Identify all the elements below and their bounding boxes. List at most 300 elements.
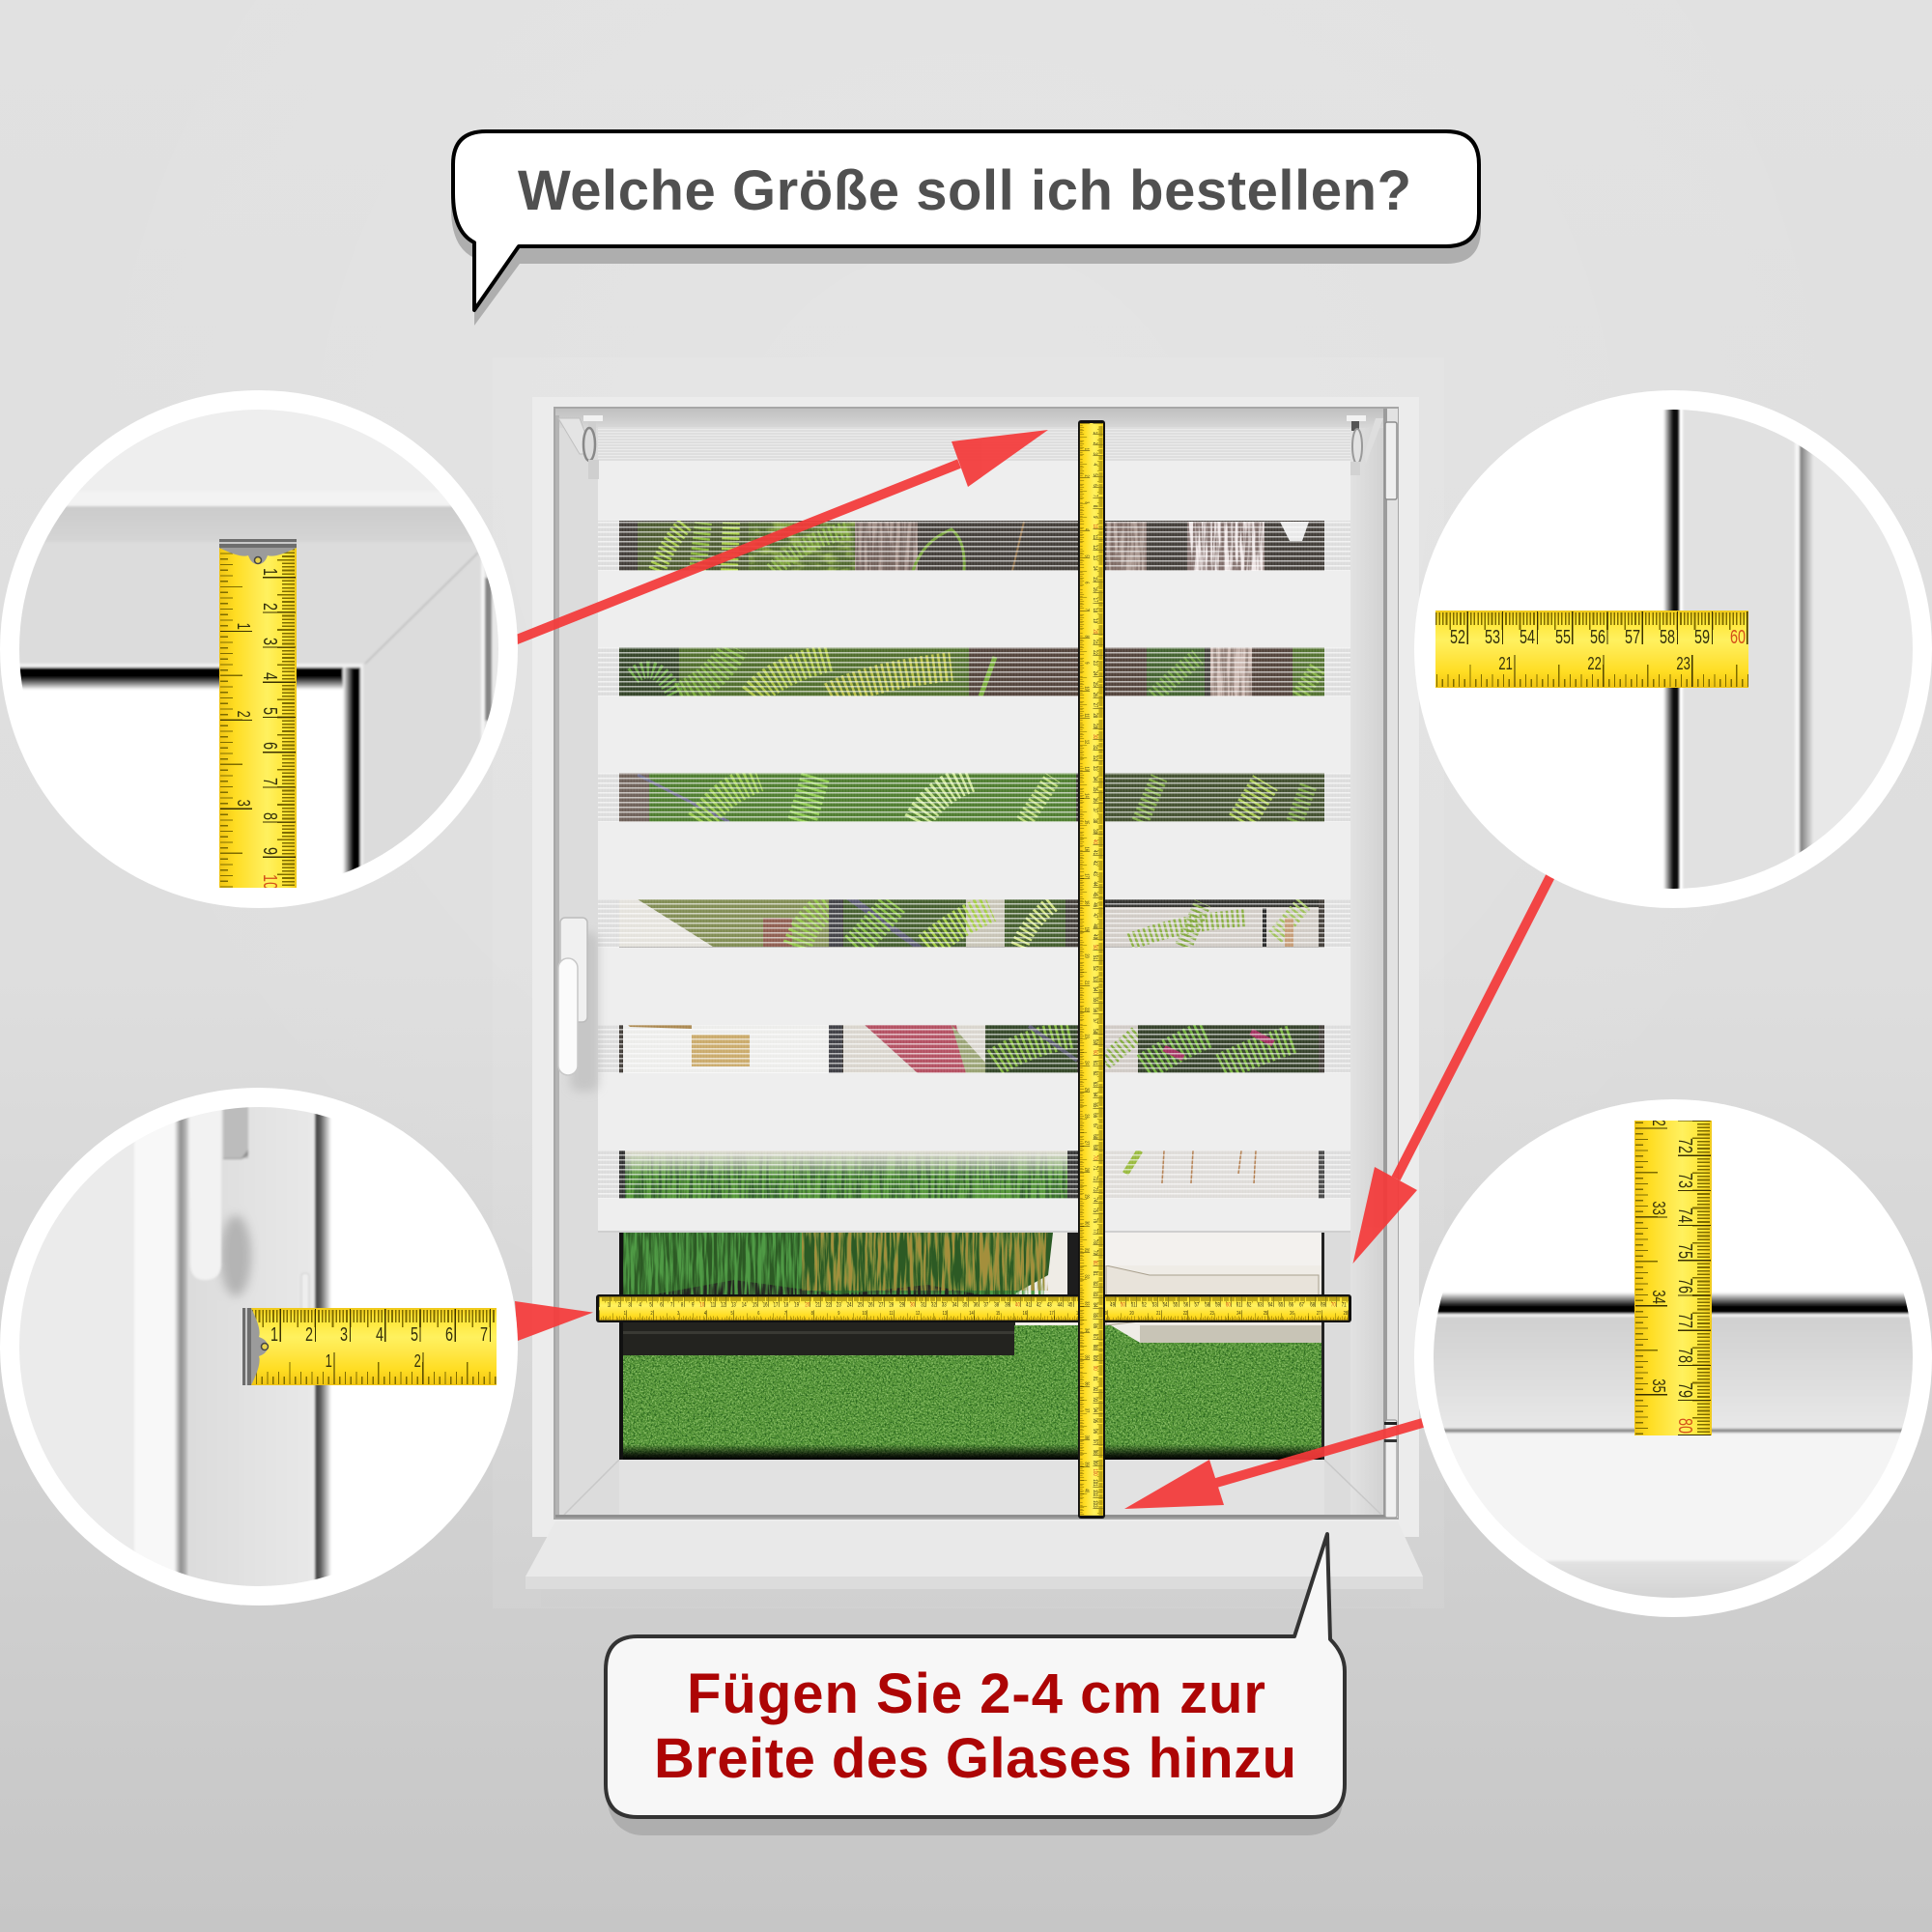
vertical measuring tape across window: 15 <box>1084 820 1090 824</box>
vertical measuring tape across window: 99 <box>1092 1461 1098 1465</box>
tape measure 1 to 7: 3 <box>340 1324 348 1346</box>
horizontal measuring tape across window: 12 <box>916 1310 920 1316</box>
foliage strip 6 <box>619 1151 1324 1199</box>
tape measure 1 to 7: 6 <box>445 1324 453 1346</box>
horizontal measuring tape across window: 50 <box>1121 1302 1125 1308</box>
vertical measuring tape across window: 2 <box>1092 442 1098 444</box>
horizontal measuring tape across window: 27 <box>879 1302 883 1308</box>
horizontal measuring tape across window: 54 <box>1163 1302 1167 1308</box>
horizontal measuring tape across window: 10 <box>863 1310 867 1316</box>
foliage strip 4 <box>619 899 1319 947</box>
horizontal measuring tape across window: 16 <box>1023 1310 1027 1316</box>
horizontal measuring tape across window: 61 <box>1236 1302 1241 1308</box>
vertical measuring tape across window: 63 <box>1092 1082 1098 1086</box>
horizontal measuring tape across window: 44 <box>1058 1302 1063 1308</box>
vertical measuring tape across window: 65 <box>1092 1102 1098 1107</box>
tape measure 1 to 7: 1 <box>270 1324 278 1346</box>
vertical measuring tape across window: 15 <box>1092 577 1098 582</box>
horizontal measuring tape across window: 71 <box>1342 1302 1347 1308</box>
tape measure 72 to 80: 78 <box>1674 1348 1695 1363</box>
tape measure 72 to 80: 33 <box>1649 1201 1668 1215</box>
arrow: to bottom of window <box>1124 1422 1426 1509</box>
horizontal measuring tape across window: 13 <box>943 1310 947 1316</box>
horizontal measuring tape across window: 3 <box>629 1302 631 1308</box>
horizontal measuring tape across window: 1 <box>624 1310 626 1316</box>
foliage strip 3 <box>619 773 1324 822</box>
horizontal measuring tape across window: 5 <box>730 1310 733 1316</box>
horizontal measuring tape across window: 38 <box>994 1302 999 1308</box>
vertical measuring tape across window: 97 <box>1092 1439 1098 1444</box>
vertical measuring tape across window: 34 <box>1092 777 1098 781</box>
tape measure 52 to 60: 55 <box>1555 627 1571 648</box>
vertical measuring tape across window: 32 <box>1084 1274 1090 1279</box>
horizontal measuring tape across window: 16 <box>763 1302 768 1308</box>
vertical measuring tape across window: 41 <box>1092 850 1098 855</box>
horizontal measuring tape across window: 2 <box>618 1302 620 1308</box>
horizontal measuring tape across window: 12 <box>721 1302 725 1308</box>
vertical measuring tape across window: 30 <box>1084 1221 1090 1225</box>
horizontal measuring tape across window: 26 <box>868 1302 872 1308</box>
horizontal measuring tape across window: 24 <box>847 1302 852 1308</box>
vertical measuring tape across window: 18 <box>1092 608 1098 612</box>
zebra blind <box>598 427 1350 1233</box>
horizontal measuring tape across window: 51 <box>1131 1302 1136 1308</box>
vertical measuring tape across window: 17 <box>1092 598 1098 602</box>
horizontal measuring tape across window: 27 <box>1317 1310 1321 1316</box>
tape measure 1 to 10: 6 <box>259 742 280 750</box>
tape measure 52 to 60: 57 <box>1625 627 1640 648</box>
vertical measuring tape across window: 19 <box>1092 618 1098 623</box>
vertical measuring tape across window: 55 <box>1092 998 1098 1002</box>
horizontal measuring tape across window: 65 <box>1278 1302 1283 1308</box>
vertical measuring tape across window: 28 <box>1084 1168 1090 1172</box>
horizontal measuring tape across window: 17 <box>774 1302 778 1308</box>
vertical measuring tape across window: 25 <box>1084 1088 1090 1092</box>
vertical measuring tape across window: 53 <box>1092 977 1098 981</box>
horizontal measuring tape across window: 6 <box>757 1310 759 1316</box>
vertical measuring tape across window: 14 <box>1092 566 1098 571</box>
horizontal measuring tape across window: 8 <box>810 1310 813 1316</box>
horizontal measuring tape across window: 1 <box>608 1302 610 1308</box>
vertical measuring tape across window: 27 <box>1084 1141 1090 1145</box>
vertical measuring tape across window: 67 <box>1092 1123 1098 1128</box>
vertical measuring tape across window: 29 <box>1084 1194 1090 1199</box>
tape measure 1 to 10: 2 <box>259 603 280 611</box>
vertical measuring tape across window: 85 <box>1092 1313 1098 1318</box>
horizontal measuring tape across window: 53 <box>1152 1302 1157 1308</box>
vertical measuring tape across window: 38 <box>1092 818 1098 823</box>
vertical measuring tape across window: 56 <box>1092 1008 1098 1012</box>
vertical measuring tape across window: 9 <box>1084 662 1090 664</box>
vertical measuring tape across window: 73 <box>1092 1187 1098 1191</box>
tape measure 1 to 10: 7 <box>259 778 280 785</box>
horizontal measuring tape across window: 23 <box>1209 1310 1214 1316</box>
tape measure 52 to 60: 22 <box>1587 654 1602 673</box>
tape measure 52 to 60: 58 <box>1660 627 1675 648</box>
vertical measuring tape across window: 96 <box>1092 1429 1098 1434</box>
vertical measuring tape across window: 54 <box>1092 987 1098 991</box>
vertical measuring tape across window: 49 <box>1092 934 1098 939</box>
vertical measuring tape across window: 35 <box>1092 787 1098 791</box>
tape measure 72 to 80: 73 <box>1674 1173 1695 1188</box>
vertical measuring tape across window: 66 <box>1092 1113 1098 1118</box>
arrow: to left end of tape <box>515 1301 593 1341</box>
vertical measuring tape across window: 50 <box>1092 945 1098 950</box>
vertical measuring tape across window: 4 <box>1084 528 1090 530</box>
horizontal measuring tape across window: 15 <box>753 1302 757 1308</box>
horizontal measuring tape across window: 68 <box>1310 1302 1315 1308</box>
horizontal measuring tape across window: 55 <box>1174 1302 1178 1308</box>
vertical measuring tape across window: 88 <box>1092 1345 1098 1350</box>
vertical measuring tape across window: 39 <box>1084 1462 1090 1466</box>
vertical measuring tape across window: 26 <box>1084 1114 1090 1119</box>
horizontal measuring tape across window: 19 <box>794 1302 799 1308</box>
tape measure 72 to 80: 80 <box>1674 1418 1695 1434</box>
tape measure 72 to 80 <box>1634 1121 1712 1435</box>
vertical measuring tape across window: 62 <box>1092 1071 1098 1076</box>
tape measure 1 to 10: 3 <box>234 800 253 807</box>
panel: detail circle top left <box>0 390 518 908</box>
tape measure 52 to 60: 23 <box>1676 654 1690 673</box>
bottom hinge <box>1384 1420 1397 1518</box>
vertical measuring tape across window: 98 <box>1092 1450 1098 1455</box>
horizontal measuring tape across window: 70 <box>1331 1302 1336 1308</box>
horizontal measuring tape across window: 20 <box>805 1302 810 1308</box>
vertical measuring tape across window: 46 <box>1092 902 1098 907</box>
vertical measuring tape across window: 33 <box>1092 766 1098 771</box>
horizontal measuring tape across window: 11 <box>711 1302 715 1308</box>
horizontal measuring tape across window: 36 <box>974 1302 978 1308</box>
top speech bubble <box>451 131 1481 326</box>
horizontal measuring tape across window: 30 <box>910 1302 915 1308</box>
horizontal measuring tape across window: 33 <box>942 1302 947 1308</box>
window sill <box>526 1521 1423 1606</box>
horizontal measuring tape across window: 25 <box>1264 1310 1267 1316</box>
panel: detail circle bottom right <box>1414 1099 1932 1617</box>
horizontal measuring tape across window: 37 <box>983 1302 988 1308</box>
horizontal measuring tape across window: 59 <box>1215 1302 1220 1308</box>
tape measure 72 to 80: 79 <box>1674 1382 1695 1398</box>
vertical measuring tape across window: 24 <box>1092 671 1098 676</box>
vertical measuring tape across window: 11 <box>1084 714 1090 718</box>
tape measure 1 to 10: 1 <box>259 568 280 576</box>
horizontal measuring tape across window: 49 <box>1110 1302 1115 1308</box>
horizontal measuring tape across window: 32 <box>931 1302 936 1308</box>
vertical measuring tape across window: 5 <box>1084 554 1090 557</box>
horizontal measuring tape across window: 20 <box>1129 1310 1134 1316</box>
fabric bands <box>598 461 1350 1233</box>
roller bracket left <box>558 415 603 479</box>
vertical measuring tape across window: 3 <box>1084 501 1090 503</box>
tape measure 72 to 80: 35 <box>1649 1378 1668 1393</box>
mesh strips <box>598 521 1350 1199</box>
horizontal measuring tape across window: 47 <box>1089 1302 1094 1308</box>
tape measure 1 to 10: 9 <box>259 847 280 855</box>
vertical measuring tape across window: 6 <box>1092 484 1098 487</box>
arrow: to top of blind <box>512 430 1048 641</box>
horizontal measuring tape across window: 13 <box>731 1302 736 1308</box>
roller bracket right <box>1347 415 1383 475</box>
vertical measuring tape across window: 82 <box>1092 1282 1098 1286</box>
vertical measuring tape across window: 36 <box>1092 798 1098 802</box>
vertical measuring tape across window: 95 <box>1092 1418 1098 1423</box>
vertical measuring tape across window: 42 <box>1092 861 1098 866</box>
vertical measuring tape across window: 91 <box>1092 1377 1098 1380</box>
vertical measuring tape across window: 14 <box>1084 793 1090 798</box>
horizontal measuring tape across window: 21 <box>1156 1310 1160 1316</box>
vertical measuring tape across window: 3 <box>1092 453 1098 455</box>
vertical measuring tape across window: 21 <box>1092 639 1098 644</box>
vertical measuring tape across window: 40 <box>1092 839 1098 844</box>
vertical measuring tape across window: 71 <box>1092 1166 1098 1171</box>
horizontal measuring tape across window: 8 <box>681 1302 683 1308</box>
vertical measuring tape across window: 21 <box>1084 980 1090 984</box>
vertical measuring tape across window: 76 <box>1092 1218 1098 1223</box>
horizontal measuring tape across window: 39 <box>1005 1302 1009 1308</box>
vertical measuring tape across window: 7 <box>1084 609 1090 611</box>
vertical measuring tape across window: 26 <box>1092 693 1098 696</box>
vertical measuring tape across window: 92 <box>1092 1387 1098 1391</box>
vertical measuring tape across window: 75 <box>1092 1208 1098 1212</box>
vertical measuring tape across window: 44 <box>1092 882 1098 887</box>
vertical measuring tape across window: 9 <box>1092 516 1098 518</box>
vertical measuring tape across window: 24 <box>1084 1061 1090 1065</box>
vertical measuring tape across window: 45 <box>1092 893 1098 896</box>
horizontal measuring tape across window: 17 <box>1049 1310 1054 1316</box>
vertical measuring tape across window: 64 <box>1092 1093 1098 1096</box>
vertical measuring tape across window: 84 <box>1092 1302 1098 1307</box>
vertical measuring tape across window: 16 <box>1092 587 1098 592</box>
horizontal measuring tape across window: 5 <box>649 1302 652 1308</box>
vertical measuring tape across window: 40 <box>1084 1489 1090 1492</box>
vertical measuring tape across window: 103 <box>1092 1500 1098 1507</box>
horizontal measuring tape across window: 56 <box>1183 1302 1188 1308</box>
horizontal measuring tape across window: 63 <box>1258 1302 1262 1308</box>
tape measure 52 to 60: 52 <box>1450 627 1465 648</box>
horizontal measuring tape across window: 14 <box>969 1310 974 1316</box>
vertical measuring tape across window: 87 <box>1092 1334 1098 1339</box>
tape measure 52 to 60: 54 <box>1520 627 1535 648</box>
vertical measuring tape across window: 29 <box>1092 724 1098 728</box>
vertical measuring tape across window: 7 <box>1092 495 1098 497</box>
horizontal measuring tape across window: 6 <box>660 1302 663 1308</box>
tape measure 52 to 60: 21 <box>1498 654 1513 673</box>
horizontal measuring tape across window: 41 <box>1026 1302 1031 1308</box>
vertical measuring tape across window: 16 <box>1084 847 1090 851</box>
tape measure 1 to 7: 5 <box>411 1324 418 1346</box>
vertical measuring tape across window: 69 <box>1092 1145 1098 1150</box>
horizontal measuring tape across window: 14 <box>742 1302 747 1308</box>
tape measure 1 to 10 <box>219 539 297 888</box>
vertical measuring tape across window: 81 <box>1092 1271 1098 1276</box>
vertical measuring tape across window: 27 <box>1092 703 1098 707</box>
vertical measuring tape across window: 51 <box>1092 955 1098 960</box>
tape measure 52 to 60 <box>1435 611 1748 688</box>
vertical measuring tape across window: 1 <box>1084 448 1090 450</box>
planter, wall, paving and lawn <box>619 1233 1324 1460</box>
foliage strip 2 <box>619 647 1324 696</box>
panel: detail circle top right <box>1414 390 1932 908</box>
horizontal measuring tape across window: 24 <box>1236 1310 1240 1316</box>
vertical measuring tape across window: 20 <box>1084 953 1090 958</box>
vertical measuring tape across window: 43 <box>1092 871 1098 876</box>
horizontal measuring tape across window: 64 <box>1268 1302 1272 1308</box>
horizontal measuring tape across window: 26 <box>1290 1310 1294 1316</box>
vertical measuring tape across window: 48 <box>1092 923 1098 928</box>
horizontal measuring tape across window: 21 <box>815 1302 820 1308</box>
horizontal measuring tape across window: 35 <box>963 1302 967 1308</box>
vertical measuring tape across window: 80 <box>1092 1261 1098 1265</box>
horizontal measuring tape across window: 66 <box>1289 1302 1293 1308</box>
horizontal measuring tape across window: 45 <box>1068 1302 1072 1308</box>
wall and window scene <box>0 397 1932 1932</box>
vertical measuring tape across window: 6 <box>1084 582 1090 583</box>
foliage strip 1 <box>638 522 1309 571</box>
vertical measuring tape across window: 2 <box>1084 474 1090 477</box>
horizontal measuring tape across window: 3 <box>677 1310 679 1316</box>
vertical measuring tape across window: 39 <box>1092 829 1098 834</box>
vertical measuring tape across window: 13 <box>1092 555 1098 560</box>
vertical measuring tape across window: 10 <box>1084 687 1090 691</box>
vertical measuring tape across window <box>1078 420 1105 1519</box>
vertical measuring tape across window: 102 <box>1092 1490 1098 1496</box>
horizontal measuring tape across window: 22 <box>826 1302 831 1308</box>
vertical measuring tape across window: 23 <box>1084 1034 1090 1038</box>
tape measure 1 to 10: 1 <box>234 622 253 629</box>
horizontal measuring tape across window: 28 <box>1344 1310 1348 1316</box>
vertical measuring tape across window: 33 <box>1084 1301 1090 1305</box>
vertical measuring tape across window: 72 <box>1092 1177 1098 1181</box>
callout text: Breite des Glases hinzu <box>654 1727 1296 1790</box>
horizontal measuring tape across window: 15 <box>996 1310 1000 1316</box>
vertical measuring tape across window: 22 <box>1084 1008 1090 1011</box>
vertical measuring tape across window: 13 <box>1084 767 1090 771</box>
horizontal measuring tape across window <box>596 1294 1351 1322</box>
vertical measuring tape across window: 34 <box>1084 1328 1090 1332</box>
vertical measuring tape across window: 74 <box>1092 1197 1098 1202</box>
arrow: to right side of blind <box>1352 874 1551 1264</box>
horizontal measuring tape across window: 60 <box>1226 1302 1231 1308</box>
vertical measuring tape across window: 4 <box>1092 463 1098 466</box>
horizontal measuring tape across window: 2 <box>650 1310 653 1316</box>
tape measure 1 to 7: 4 <box>376 1324 384 1346</box>
tape measure 52 to 60: 59 <box>1694 627 1710 648</box>
horizontal measuring tape across window: 43 <box>1047 1302 1052 1308</box>
horizontal measuring tape across window: 48 <box>1099 1302 1104 1308</box>
vertical measuring tape across window: 8 <box>1092 505 1098 507</box>
horizontal measuring tape across window: 10 <box>699 1302 704 1308</box>
vertical measuring tape across window: 52 <box>1092 966 1098 971</box>
horizontal measuring tape across window: 7 <box>670 1302 672 1308</box>
horizontal measuring tape across window: 28 <box>889 1302 894 1308</box>
horizontal measuring tape across window: 42 <box>1037 1302 1041 1308</box>
vertical measuring tape across window: 36 <box>1084 1381 1090 1385</box>
tape measure 72 to 80: 77 <box>1674 1313 1695 1328</box>
vertical measuring tape across window: 23 <box>1092 661 1098 666</box>
bottom speech bubble <box>606 1534 1345 1835</box>
vertical measuring tape across window: 25 <box>1092 682 1098 687</box>
tape measure 1 to 7 <box>242 1308 497 1385</box>
vertical measuring tape across window: 101 <box>1092 1479 1098 1487</box>
vertical measuring tape across window: 30 <box>1092 734 1098 739</box>
vertical measuring tape across window: 17 <box>1084 873 1090 878</box>
horizontal measuring tape across window: 52 <box>1142 1302 1147 1308</box>
tape measure 72 to 80: 75 <box>1674 1243 1695 1259</box>
tape measure 72 to 80: 34 <box>1649 1290 1668 1304</box>
horizontal measuring tape across window: 18 <box>1076 1310 1080 1316</box>
horizontal measuring tape across window: 40 <box>1015 1302 1020 1308</box>
vertical measuring tape across window: 38 <box>1084 1435 1090 1439</box>
horizontal measuring tape across window: 31 <box>921 1302 925 1308</box>
horizontal measuring tape across window: 69 <box>1321 1302 1325 1308</box>
vertical measuring tape across window: 57 <box>1092 1018 1098 1023</box>
vertical measuring tape across window: 86 <box>1092 1323 1098 1328</box>
vertical measuring tape across window: 83 <box>1092 1293 1098 1296</box>
vertical measuring tape across window: 12 <box>1092 545 1098 550</box>
vertical measuring tape across window: 61 <box>1092 1061 1098 1065</box>
roller cassette <box>598 427 1350 461</box>
horizontal measuring tape across window: 23 <box>837 1302 841 1308</box>
vertical measuring tape across window: 94 <box>1092 1407 1098 1412</box>
vertical measuring tape across window: 31 <box>1084 1248 1090 1252</box>
vertical measuring tape across window: 22 <box>1092 650 1098 655</box>
vertical measuring tape across window: 68 <box>1092 1134 1098 1139</box>
top hinge <box>1385 422 1397 499</box>
vertical measuring tape across window: 5 <box>1092 473 1098 476</box>
callout text <box>654 1662 1296 1790</box>
horizontal measuring tape across window: 46 <box>1078 1302 1083 1308</box>
tape measure 72 to 80: 74 <box>1674 1208 1695 1223</box>
tape measure 1 to 10: 4 <box>259 672 280 680</box>
vertical measuring tape across window: 32 <box>1092 755 1098 760</box>
horizontal measuring tape across window: 18 <box>783 1302 788 1308</box>
tape measure 1 to 10: 2 <box>234 711 253 718</box>
vertical measuring tape across window: 77 <box>1092 1229 1098 1234</box>
panel: detail circle bottom left <box>0 1088 518 1605</box>
window handle <box>558 918 599 1092</box>
vertical measuring tape across window: 35 <box>1084 1354 1090 1359</box>
foliage strip 5 <box>623 1025 1319 1073</box>
tape measure 1 to 10: 8 <box>259 812 280 820</box>
vertical measuring tape across window: 70 <box>1092 1155 1098 1160</box>
vertical measuring tape across window: 1 <box>1092 432 1098 434</box>
horizontal measuring tape across window: 34 <box>952 1302 957 1308</box>
vertical measuring tape across window: 100 <box>1092 1468 1098 1476</box>
tape measure 72 to 80: 76 <box>1674 1278 1695 1293</box>
vertical measuring tape across window: 31 <box>1092 745 1098 750</box>
window frame <box>493 357 1444 1608</box>
tape measure 1 to 7: 2 <box>305 1324 313 1346</box>
tape measure 1 to 10: 5 <box>259 707 280 715</box>
vertical measuring tape across window: 8 <box>1084 635 1090 638</box>
horizontal measuring tape across window: 7 <box>784 1310 786 1316</box>
vertical measuring tape across window: 78 <box>1092 1239 1098 1244</box>
horizontal measuring tape across window: 19 <box>1103 1310 1107 1316</box>
horizontal measuring tape across window: 9 <box>692 1302 694 1308</box>
horizontal measuring tape across window: 4 <box>639 1302 641 1308</box>
horizontal measuring tape across window: 67 <box>1299 1302 1304 1308</box>
tape measure 52 to 60: 56 <box>1590 627 1605 648</box>
vertical measuring tape across window: 58 <box>1092 1029 1098 1034</box>
tape measure 72 to 80: 72 <box>1674 1138 1695 1153</box>
vertical measuring tape across window: 90 <box>1092 1366 1098 1371</box>
callout text: Fügen Sie 2-4 cm zur <box>687 1662 1265 1725</box>
horizontal measuring tape across window: 22 <box>1183 1310 1187 1316</box>
vertical measuring tape across window: 79 <box>1092 1250 1098 1255</box>
vertical measuring tape across window: 19 <box>1084 927 1090 931</box>
vertical measuring tape across window: 37 <box>1092 808 1098 812</box>
horizontal measuring tape across window: 58 <box>1205 1302 1209 1308</box>
